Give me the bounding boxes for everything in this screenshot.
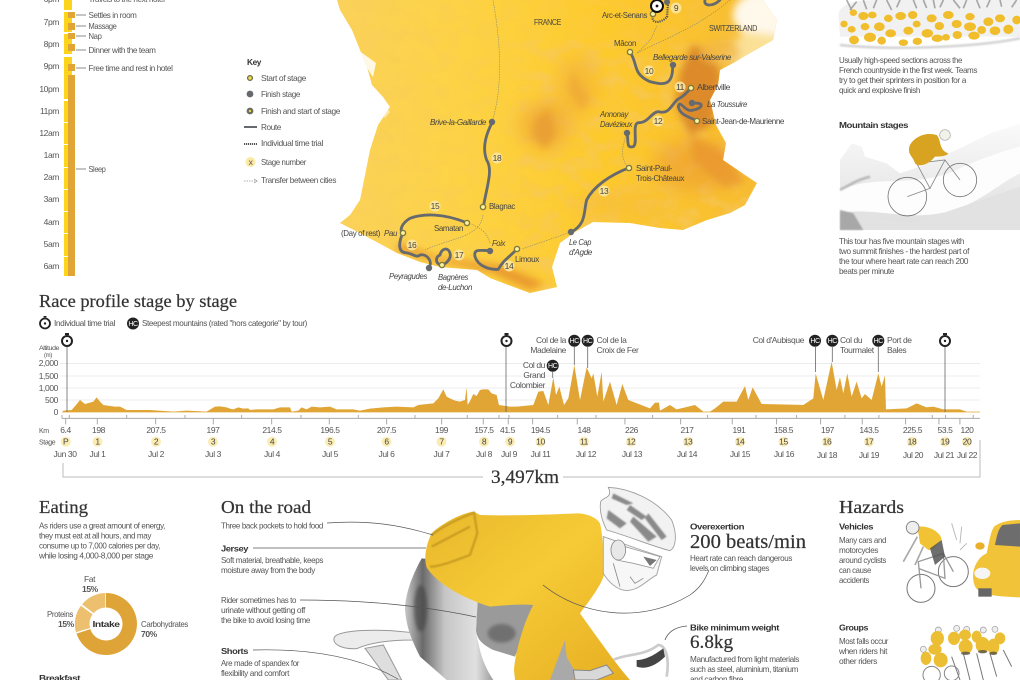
hour labels: 6am [44, 261, 59, 271]
map key: x [249, 157, 254, 167]
map place labels: (Day of rest) [341, 228, 381, 238]
donut labels: 15% [82, 584, 99, 594]
stage dates: Jul 11 [531, 449, 551, 459]
annotation: urination: urinate without getting off [221, 605, 306, 615]
hour labels: 5am [44, 239, 59, 249]
annotation: overexertion: 200 beats/min [690, 531, 806, 553]
text: vehicles: accidents [839, 575, 869, 585]
map place labels: Trois-Châteaux [636, 173, 685, 183]
text: flat stages [839, 55, 977, 95]
transfers between cities [425, 0, 730, 250]
stage distances: 198 [92, 425, 106, 435]
leader lines [253, 522, 476, 679]
altitude axis: 2,000 [39, 358, 59, 368]
stage dates: Jul 12 [576, 449, 597, 459]
altitude axis: 0 [54, 407, 59, 417]
activity labels: Dinner with the team [88, 45, 156, 55]
stage number badges: 14 [505, 261, 514, 271]
mountain pass labels: Col du [523, 360, 546, 370]
mountain pass labels: Croix de Fer [596, 345, 639, 355]
altitude axis [39, 346, 980, 417]
text: flat stages: try to get their sprinters in position for a [839, 75, 967, 85]
profile legend: Individual time trial [54, 318, 115, 328]
hour labels: 10pm [39, 84, 59, 94]
panel: rider daily schedule timeline [39, 0, 173, 276]
time trial and mountain markers: HC [570, 338, 579, 345]
time trial and mountain markers: HC [810, 338, 820, 345]
annotation: jersey [221, 544, 323, 575]
stage number badges: 11 [580, 437, 589, 447]
distance axis [62, 415, 980, 424]
stage number badges: 14 [736, 437, 745, 447]
time trial and mountain markers: HC [548, 363, 558, 370]
time trial and mountain markers: HC [828, 338, 837, 345]
stage dates: Jul 21 [934, 450, 955, 460]
stage number badges: 15 [779, 437, 788, 447]
stage dates: Jul 18 [817, 450, 838, 460]
saddle and seat post [334, 630, 413, 680]
hour labels: 2am [44, 172, 59, 182]
stage number badges: 10 [536, 437, 545, 447]
hour labels: 9pm [44, 61, 59, 71]
stage distances [39, 425, 974, 435]
donut chart: intake: Intake [92, 619, 120, 629]
map place labels: Mâcon [614, 38, 637, 48]
annotation: bike minimum weight: 6.8kg [690, 632, 734, 653]
map place labels: Samatan [434, 223, 464, 233]
stage number badges: 8 [482, 437, 487, 447]
icon: time trial stopwatch on map [651, 0, 663, 12]
text: flat stages: Usually high-speed sections across the [839, 55, 963, 65]
text: groups: other riders [839, 656, 877, 666]
stage number badges: Stage [39, 440, 56, 446]
text: groups: when riders hit [838, 646, 888, 656]
map key: Finish stage [261, 89, 301, 99]
text: vehicles: Vehicles [839, 522, 874, 532]
stage distances: 6.4 [60, 425, 71, 435]
terrain [330, 0, 797, 300]
annotation: back pockets: Three back pockets to hold food [221, 520, 324, 530]
jersey pockets [430, 513, 477, 567]
text: groups: Groups [839, 622, 869, 632]
stage distances: 143.5 [859, 425, 879, 435]
stage distances: 217 [681, 425, 694, 435]
annotation: overexertion: Overexertion [690, 522, 744, 532]
annotation: bike minimum weight [665, 622, 799, 680]
text: vehicles: motorcycles [839, 545, 878, 555]
stage distances: 199 [435, 425, 449, 435]
donut labels: 15% [58, 619, 75, 629]
illustration: group crash [920, 625, 1012, 680]
route stages [400, 0, 720, 269]
map key: Individual time trial [261, 138, 324, 148]
annotation: jersey: Soft material, breathable, keeps [221, 555, 323, 565]
hour labels: 1am [44, 150, 59, 160]
stage distances: 197 [821, 425, 835, 435]
map key: Finish and start of stage [261, 106, 341, 116]
mountain pass labels: Col du [840, 335, 863, 345]
map place labels: Le Cap [569, 237, 592, 247]
stage number badges: 4 [270, 437, 275, 447]
shorts and legs [405, 558, 533, 680]
stage distances: 207.5 [377, 425, 397, 435]
annotation: overexertion [543, 522, 806, 613]
hour labels: 8pm [44, 39, 59, 49]
stage dates: Jul 14 [677, 449, 698, 459]
panel: race profile stage by stage [39, 291, 980, 488]
donut labels: Carbohydrates [141, 619, 188, 629]
annotation: jersey: moisture away from the body [221, 565, 316, 575]
stage dates: Jun 30 [53, 449, 77, 459]
profile legend: Steepest mountains (rated "hors categorie" by tour) [142, 318, 308, 328]
stage dates: Jul 2 [148, 449, 165, 459]
annotation: urination [221, 595, 311, 625]
map place labels: Foix [492, 238, 506, 248]
donut labels [47, 574, 188, 639]
text: groups: Most falls occur [839, 636, 889, 646]
stage distances: 197 [207, 425, 220, 435]
map place labels: Bagnères [438, 272, 469, 282]
text: flat stages: French countryside in the first week. Teams [839, 65, 977, 75]
illustration: peloton of riders [838, 0, 1020, 48]
mountain pass labels: Col d'Aubisque [753, 335, 805, 345]
stage dates [53, 449, 978, 460]
stage number badges: 9 [508, 437, 513, 447]
map of France with route [330, 0, 797, 300]
stage number badges: 1 [95, 437, 100, 447]
stage number badges [406, 2, 686, 272]
stage number badges: 9 [674, 3, 679, 13]
stage distances: 41.5 [500, 425, 516, 435]
altitude axis: 500 [45, 395, 59, 405]
panel: hazards [838, 497, 1020, 680]
stage start and finish markers [400, 0, 700, 271]
donut labels: Fat [84, 574, 96, 584]
stage dates: Jul 22 [957, 450, 978, 460]
annotation: shorts: flexibility and comfort [221, 668, 290, 678]
illustration: cyclist [334, 487, 675, 680]
map place labels: Saint-Paul- [636, 163, 673, 173]
map place labels: d'Agde [569, 247, 593, 257]
stage number badges: 13 [684, 437, 693, 447]
activity labels: Settles in room [88, 10, 137, 20]
donut labels: 70% [141, 629, 158, 639]
jersey [425, 512, 630, 680]
eating text: consume up to 7,000 calories per day, [39, 540, 160, 550]
stage dates: Jul 4 [264, 449, 281, 459]
profile legend: HC [128, 321, 138, 328]
panel: on the road [221, 487, 806, 680]
map place labels: Arc-et-Senans [602, 10, 647, 20]
stage distances: 157.5 [474, 425, 494, 435]
text: vehicles: can cause [839, 565, 872, 575]
stage dates: Jul 3 [205, 449, 222, 459]
illustration: cyclist and car [903, 520, 1020, 602]
hour labels: 3am [44, 194, 59, 204]
text: mountain stages: This tour has five mountain stages with [839, 236, 965, 246]
mountain pass labels: Col de la [596, 335, 627, 345]
map place labels: de-Luchon [438, 282, 473, 292]
activity labels [76, 0, 173, 174]
mountain pass labels: Tourmalet [840, 345, 875, 355]
stage dates: Jul 13 [622, 449, 643, 459]
map place labels: FRANCE [534, 17, 562, 27]
stage distances: 148 [578, 425, 591, 435]
stage number badges: 2 [154, 437, 159, 447]
altitude axis: Altitude [39, 346, 60, 352]
time trial and mountain markers [62, 333, 950, 412]
profile legend [40, 316, 308, 330]
heading: Eating [39, 497, 88, 517]
mountain pass labels: Colombier [510, 380, 546, 390]
stage dates: Jul 1 [90, 449, 106, 459]
stage number badges: 7 [439, 437, 444, 447]
mountain pass labels: Col de la [536, 335, 567, 345]
altitude axis: 1,000 [39, 383, 59, 393]
donut chart: intake [75, 593, 137, 655]
text: vehicles [839, 522, 887, 585]
stage distances: 158.5 [774, 425, 794, 435]
map place labels: Limoux [515, 254, 540, 264]
map place labels: Annonay [599, 109, 629, 119]
time trial and mountain markers: HC [874, 338, 883, 345]
annotation: overexertion: levels on climbing stages [690, 563, 769, 573]
stage dates: Jul 7 [434, 449, 450, 459]
eating text: As riders use a great amount of energy, [39, 520, 165, 530]
annotation: overexertion: Heart rate can reach dangerous [690, 553, 792, 563]
map place labels: SWITZERLAND [709, 23, 757, 33]
hour labels: 12am [39, 128, 59, 138]
text: groups [838, 622, 889, 666]
activity labels: Sleep [88, 164, 106, 174]
map key: Route [261, 122, 282, 132]
stage number badges: 18 [908, 437, 917, 447]
map key: Key [247, 57, 262, 67]
map key: Stage number [261, 157, 307, 167]
time trial and mountain markers: HC [583, 338, 593, 345]
stage number badges: P [63, 437, 69, 447]
stage number badges: 6 [384, 437, 389, 447]
stage distances: 225.5 [903, 425, 923, 435]
annotation: urination: the bike to avoid losing time [221, 615, 311, 625]
hour labels: 4am [44, 217, 59, 227]
stage number badges: 15 [431, 201, 440, 211]
map place labels: Blagnac [489, 201, 516, 211]
annotation: bike minimum weight: Bike minimum weight [690, 622, 780, 632]
stage dates: Jul 15 [730, 449, 751, 459]
stage number badges: 12 [654, 116, 663, 126]
stage distances: 194.5 [531, 425, 551, 435]
heading: mountain stages: Mountain stages [839, 120, 909, 130]
heading: Hazards [839, 497, 904, 517]
head and helmet [600, 487, 675, 591]
illustration: mountain climb [840, 124, 1020, 230]
map place labels: Saint-Jean-de-Maurienne [702, 116, 785, 126]
far leg gap [550, 640, 574, 680]
annotation: urination: Rider sometimes has to [221, 595, 297, 605]
heading: Race profile stage by stage [39, 291, 237, 311]
stage dates: Jul 16 [774, 449, 795, 459]
text: vehicles: Many cars and [839, 535, 887, 545]
stage number badges: 20 [963, 437, 972, 447]
map key: Transfer between cities [261, 175, 336, 185]
stage distances: 53.5 [938, 425, 953, 435]
map key [244, 57, 341, 185]
heading: On the road [221, 497, 311, 517]
total distance bracket: 3,497km [491, 467, 559, 488]
stage dates: Jul 19 [859, 450, 880, 460]
stage number badges: 19 [941, 437, 950, 447]
annotation: shorts [221, 646, 300, 678]
stage number badges: 11 [676, 82, 685, 92]
stage number badges: 5 [328, 437, 333, 447]
panel: stage types sidebar [838, 0, 1020, 276]
stage number badges: 18 [493, 153, 502, 163]
hour labels [39, 0, 59, 271]
time trial dotted route [652, 3, 668, 22]
map place labels: La Toussuire [707, 99, 748, 109]
stage distances: 207.5 [146, 425, 166, 435]
activity labels: Free time and rest in hotel [88, 63, 173, 73]
map place labels: Davézieux [600, 119, 633, 129]
mountain pass labels: Madelaine [530, 345, 567, 355]
mountain pass labels [510, 335, 912, 390]
stage dates: Jul 5 [322, 449, 339, 459]
stage distances: 214.5 [262, 425, 282, 435]
text: mountain stages [839, 236, 970, 276]
stage number badges [39, 437, 972, 447]
elevation area chart east [510, 362, 980, 412]
map place labels: Brive-la-Gaillarde [430, 117, 487, 127]
stage dates: Jul 9 [501, 449, 518, 459]
activity labels: Nap [88, 31, 102, 41]
stage dates: Jul 6 [379, 449, 395, 459]
map place labels: Pau [384, 228, 398, 238]
map key: Start of stage [261, 73, 307, 83]
stage distances: 120 [961, 425, 974, 435]
eating text [38, 520, 165, 560]
altitude axis: 1,500 [39, 371, 59, 381]
stage number badges: 17 [865, 437, 874, 447]
altitude axis: (m) [44, 353, 52, 359]
text: mountain stages: two summit finishes - the hardest part of [839, 246, 970, 256]
hour labels: 7pm [44, 17, 59, 27]
annotation: bike minimum weight: such as steel, aluminium, titanium [690, 664, 798, 674]
activity labels: Massage [88, 21, 117, 31]
total distance bracket [63, 440, 980, 488]
elevation area chart [62, 387, 510, 412]
stage distances: 191 [733, 425, 746, 435]
stage distances: 226 [625, 425, 639, 435]
stage number badges: 3 [211, 437, 216, 447]
handlebar and hand [573, 645, 668, 680]
text: vehicles: around cyclists [839, 555, 886, 565]
stage distances: 196.5 [320, 425, 340, 435]
stage number badges: 16 [408, 240, 417, 250]
annotation: shorts: Are made of spandex for [221, 658, 300, 668]
map place labels: Peyragudes [389, 271, 428, 281]
map place labels: Bellegarde sur-Valserine [653, 52, 732, 62]
stage number badges: 13 [600, 186, 609, 196]
eating text: while losing 4,000-8,000 per stage [38, 550, 154, 560]
mountain pass labels: Port de [887, 335, 912, 345]
eating text: they must eat at all hours, and may [39, 530, 152, 540]
stage dates: Jul 8 [476, 449, 493, 459]
annotation: jersey: Jersey [221, 544, 249, 554]
annotation: bike minimum weight: Manufactured from light materials [690, 654, 799, 664]
text: flat stages: quick and explosive finish [839, 85, 921, 95]
annotation: shorts: Shorts [221, 646, 249, 656]
stage number badges: 12 [627, 437, 636, 447]
text: mountain stages: the tour where heart rate can reach 200 [839, 256, 969, 266]
stage number badges: 16 [823, 437, 832, 447]
panel: eating [38, 497, 188, 680]
timeline orange activity blocks [68, 12, 75, 276]
timeline yellow hour bar [64, 0, 72, 276]
map place labels: Albertville [697, 82, 731, 92]
donut labels: Proteins [47, 609, 73, 619]
mountain pass labels: Bales [887, 345, 906, 355]
stage number badges: 17 [455, 250, 464, 260]
stage number badges: 10 [645, 66, 654, 76]
stage distances: Km [39, 428, 49, 435]
hour labels: 11pm [40, 106, 59, 116]
mountain pass labels: Grand [523, 370, 546, 380]
stage dates: Jul 20 [903, 450, 924, 460]
map place labels [341, 10, 785, 292]
text: mountain stages: beats per minute [839, 266, 895, 276]
